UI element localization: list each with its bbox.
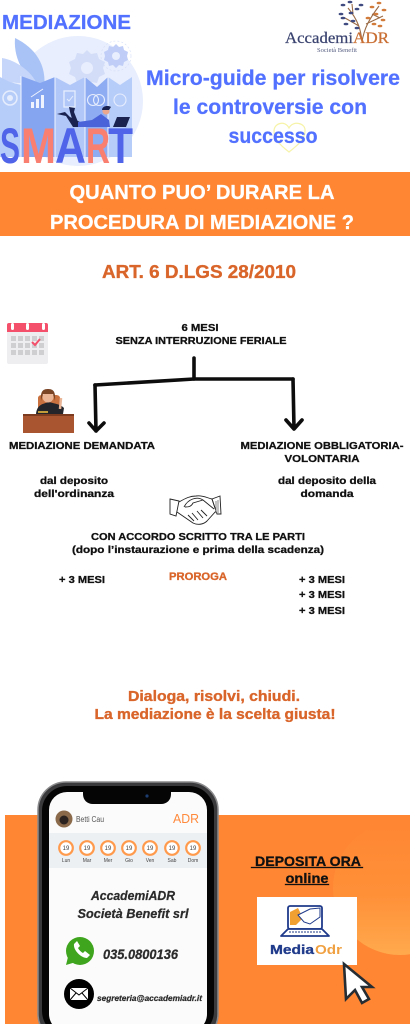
icon: faint heart xyxy=(274,123,305,152)
slogan: La mediazione è la scelta giusta! xyxy=(94,707,336,723)
logo: mediaodr: Media xyxy=(270,943,315,957)
logo: accademiadr: Società Benefit xyxy=(317,47,357,54)
label: proroga: PROROGA xyxy=(169,571,227,583)
text: plus three months right xyxy=(299,574,345,617)
text: six months: 6 MESI xyxy=(182,322,219,334)
illustration: smart: M xyxy=(21,118,56,174)
text: six months: SENZA INTERRUZIONE FERIALE xyxy=(116,335,286,347)
text: plus three months right: + 3 MESI xyxy=(299,589,345,601)
branch: demandata: MEDIAZIONE DEMANDATA xyxy=(9,440,155,452)
logo: accademiadr: ADR xyxy=(353,30,389,47)
logo: accademiadr: Accademi xyxy=(285,30,354,47)
branch: demandata xyxy=(9,440,155,500)
arrow: left xyxy=(89,385,104,431)
branch: obbligatoria: dal deposito della xyxy=(278,475,376,487)
icon: calendar xyxy=(7,323,48,364)
phone company name: AccademiADR xyxy=(90,889,175,903)
phone xyxy=(38,782,218,1024)
phone header xyxy=(56,810,199,828)
branch: demandata: dell'ordinanza xyxy=(34,488,114,500)
text: written agreement: (dopo l’instaurazione e prima della scadenza) xyxy=(72,544,324,556)
logo: mediaodr: Odr xyxy=(315,943,342,957)
icon: whatsapp xyxy=(66,937,94,965)
cta: deposita ora online: DEPOSITA ORA xyxy=(255,853,361,869)
phone week strip: 19 xyxy=(84,846,91,852)
title: mediazione: MEDIAZIONE xyxy=(2,12,131,34)
phone company name xyxy=(78,889,189,921)
illustration: smart: T xyxy=(108,118,133,174)
banner: question: QUANTO PUO’ DURARE LA xyxy=(70,182,334,204)
phone week strip: Mar xyxy=(83,858,92,864)
arrows: branch xyxy=(89,358,302,431)
phone week strip: Lun xyxy=(62,858,70,864)
phone notch xyxy=(83,789,171,804)
branch: demandata: dal deposito xyxy=(40,475,108,487)
phone week strip: 19 xyxy=(169,846,176,852)
panel: footer xyxy=(5,815,410,1024)
icon: cursor xyxy=(344,964,372,1003)
cta: deposita ora online: online xyxy=(286,870,329,886)
phone week strip: 19 xyxy=(147,846,154,852)
phone week strip: 19 xyxy=(63,846,70,852)
icon: judge xyxy=(23,389,74,433)
phone week strip: 19 xyxy=(190,846,197,852)
logo: mediaodr xyxy=(257,897,357,965)
branch: obbligatoria: VOLONTARIA xyxy=(284,453,360,465)
banner: question xyxy=(0,172,410,236)
branch: obbligatoria: domanda xyxy=(300,488,354,500)
arrow: right xyxy=(286,379,302,429)
phone week strip: Dom xyxy=(188,858,198,864)
phone header: ADR xyxy=(173,811,199,826)
illustration: smart: S xyxy=(0,118,20,174)
illustration: smart: A xyxy=(55,118,86,174)
phone header: Betti Cau xyxy=(76,815,104,824)
phone week strip: Gio xyxy=(125,858,133,864)
heading: article: ART. 6 D.LGS 28/2010 xyxy=(102,262,296,282)
branch: obbligatoria: MEDIAZIONE OBBLIGATORIA- xyxy=(240,440,404,452)
text: written agreement: CON ACCORDO SCRITTO TRA LE PARTI xyxy=(91,531,305,543)
phone week strip: Sab xyxy=(168,858,177,864)
subtitle: Micro-guide per risolvere xyxy=(146,67,400,90)
subtitle: successo xyxy=(228,125,318,148)
text: plus three months left: + 3 MESI xyxy=(59,574,105,586)
phone week strip: 19 xyxy=(105,846,112,852)
text: plus three months right: + 3 MESI xyxy=(299,574,345,586)
phone week strip: 19 xyxy=(126,846,133,852)
text: six months xyxy=(116,322,286,347)
cta: deposita ora online xyxy=(251,853,363,886)
logo: accademiadr xyxy=(285,1,389,54)
phone company name: Società Benefit srl xyxy=(78,907,189,921)
phone week strip xyxy=(49,833,207,868)
text: phone number: 035.0800136 xyxy=(103,947,178,962)
text: plus three months right: + 3 MESI xyxy=(299,605,345,617)
subtitle xyxy=(146,67,400,152)
banner: question: PROCEDURA DI MEDIAZIONE ? xyxy=(50,212,354,234)
text: written agreement xyxy=(72,531,324,556)
icon: handshake xyxy=(170,496,221,524)
illustration: smart: R xyxy=(86,118,110,174)
icon: email xyxy=(64,979,94,1009)
phone week strip: Ven xyxy=(146,858,155,864)
slogan xyxy=(94,689,336,723)
slogan: Dialoga, risolvi, chiudi. xyxy=(128,689,300,705)
illustration: smart xyxy=(0,36,143,174)
subtitle: le controversie con xyxy=(173,96,367,119)
branch: obbligatoria xyxy=(240,440,404,500)
text: email: segreteria@accademiadr.it xyxy=(97,993,203,1003)
phone week strip: Mer xyxy=(104,858,113,864)
